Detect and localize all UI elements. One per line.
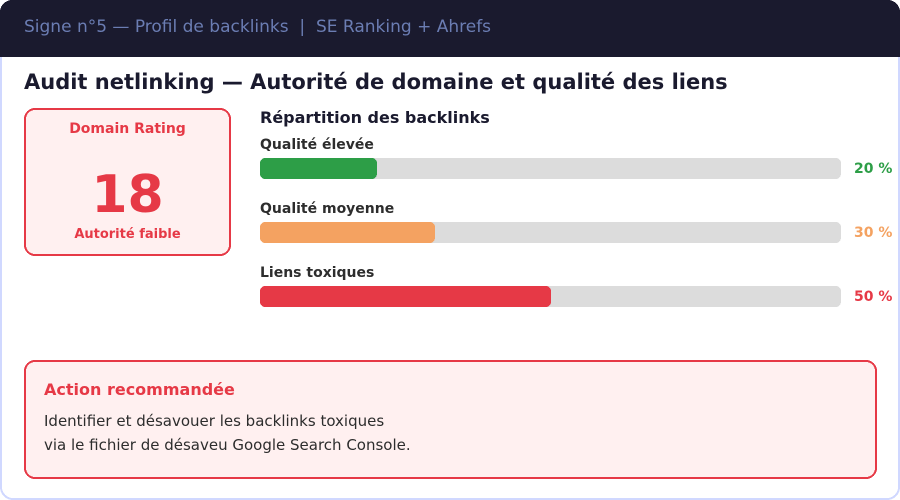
label: Liens toxiques bbox=[260, 265, 374, 281]
fill 30% bbox=[260, 222, 435, 243]
row: toxic links bbox=[260, 265, 892, 307]
value: 30 % bbox=[854, 225, 892, 241]
track bbox=[260, 222, 841, 243]
value: 20 % bbox=[854, 161, 892, 177]
domain rating label: Domain Rating bbox=[69, 121, 186, 137]
authority verdict: Autorité faible bbox=[74, 227, 181, 242]
action heading: Action recommandée bbox=[44, 380, 235, 399]
label: Qualité élevée bbox=[260, 137, 374, 153]
action text: via le fichier de désaveu Google Search Console. bbox=[44, 436, 411, 454]
track bbox=[260, 158, 841, 179]
fill 20% bbox=[260, 158, 377, 179]
track bbox=[260, 286, 841, 307]
panel: recommended action bbox=[25, 361, 876, 478]
label: Qualité moyenne bbox=[260, 201, 394, 217]
action text: Identifier et désavouer les backlinks toxiques bbox=[44, 412, 384, 430]
value: 50 % bbox=[854, 289, 892, 305]
header text: Signe n°5 — Profil de backlinks | SE Ranking + Ahrefs bbox=[24, 17, 491, 37]
bar chart: backlink distribution bbox=[260, 137, 892, 307]
header band bbox=[0, 0, 900, 57]
chart heading: Répartition des backlinks bbox=[260, 108, 490, 127]
panel: domain rating bbox=[25, 109, 230, 255]
row: medium quality bbox=[260, 201, 892, 243]
fill 50% bbox=[260, 286, 551, 307]
domain rating value: 18 bbox=[91, 165, 164, 225]
action text bbox=[44, 412, 411, 454]
row: high quality bbox=[260, 137, 892, 179]
title: Audit netlinking — Autorité de domaine et qualité des liens bbox=[24, 70, 728, 94]
